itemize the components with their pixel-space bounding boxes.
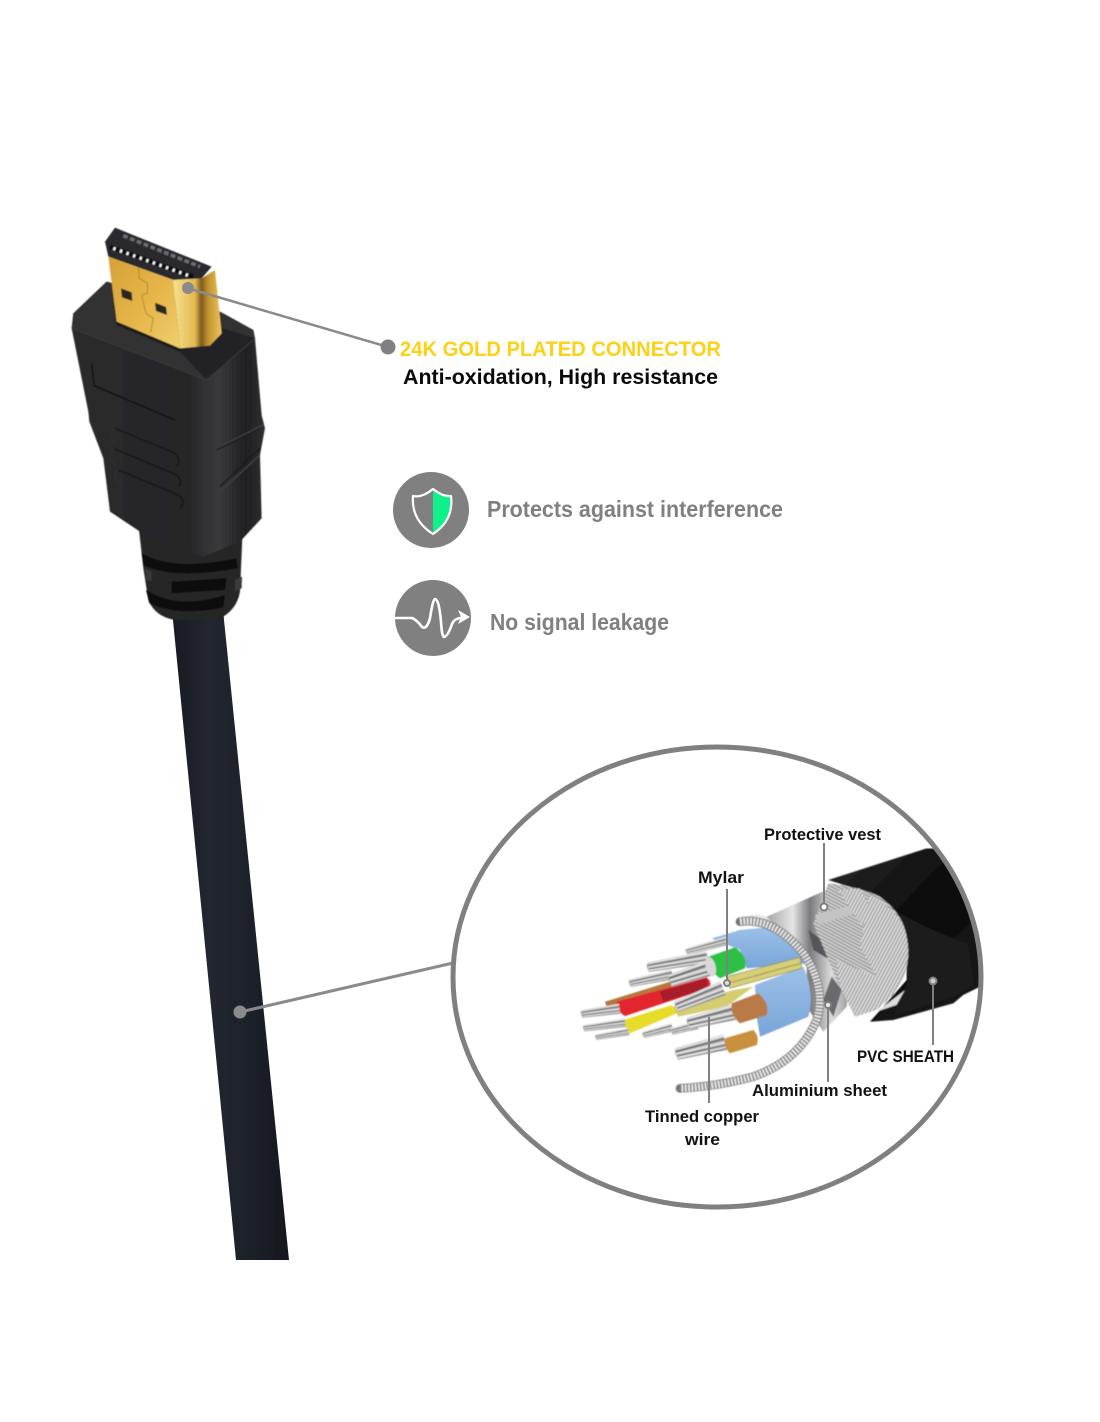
middle strands — [673, 987, 753, 1017]
HDMI connector — [72, 228, 265, 620]
tan core — [674, 1030, 758, 1062]
blue foil tubes — [712, 927, 808, 968]
braid shield — [812, 883, 910, 990]
magnifier circle — [453, 747, 981, 1207]
label: PVC sheath: PVC SHEATH — [857, 1047, 954, 1066]
label: protective vest: Protective vest — [764, 825, 881, 844]
icon: signal wave — [395, 580, 471, 656]
gold plug — [105, 228, 222, 348]
label: aluminium sheet: Aluminium sheet — [752, 1081, 887, 1100]
heading: gold connector: 24K GOLD PLATED CONNECTOR — [400, 338, 721, 361]
cable — [172, 610, 289, 1260]
grooves — [92, 363, 175, 420]
brown core — [685, 993, 767, 1031]
brown rear core — [604, 981, 672, 1006]
strain relief — [137, 515, 243, 620]
cutaway cable illustration — [580, 848, 1000, 1088]
red core — [580, 977, 710, 1019]
label: tinned copper wire: wire — [684, 1130, 720, 1149]
icon: shield — [393, 472, 469, 548]
feature: no leakage: No signal leakage — [490, 609, 669, 635]
yellow core — [582, 1005, 678, 1041]
PVC sheath — [828, 848, 978, 1022]
striped shield tape — [727, 957, 802, 988]
subheading: Anti-oxidation, High resistance — [403, 366, 718, 389]
top and rear strands — [685, 937, 728, 956]
feature: interference: Protects against interference — [487, 496, 783, 522]
label: tinned copper wire: Tinned copper — [645, 1107, 759, 1126]
label: mylar: Mylar — [698, 868, 744, 887]
glare on sheath edge — [877, 990, 905, 1012]
green core — [666, 947, 746, 989]
aluminium section — [767, 888, 853, 1032]
label: tinned copper wire — [645, 1107, 759, 1149]
leader line to gold connector — [182, 282, 396, 354]
leader line to circle — [234, 963, 453, 1018]
drain wire back loop — [740, 918, 787, 933]
drain wire — [680, 921, 820, 1088]
callout leaders — [709, 843, 936, 1103]
housing — [72, 282, 265, 557]
